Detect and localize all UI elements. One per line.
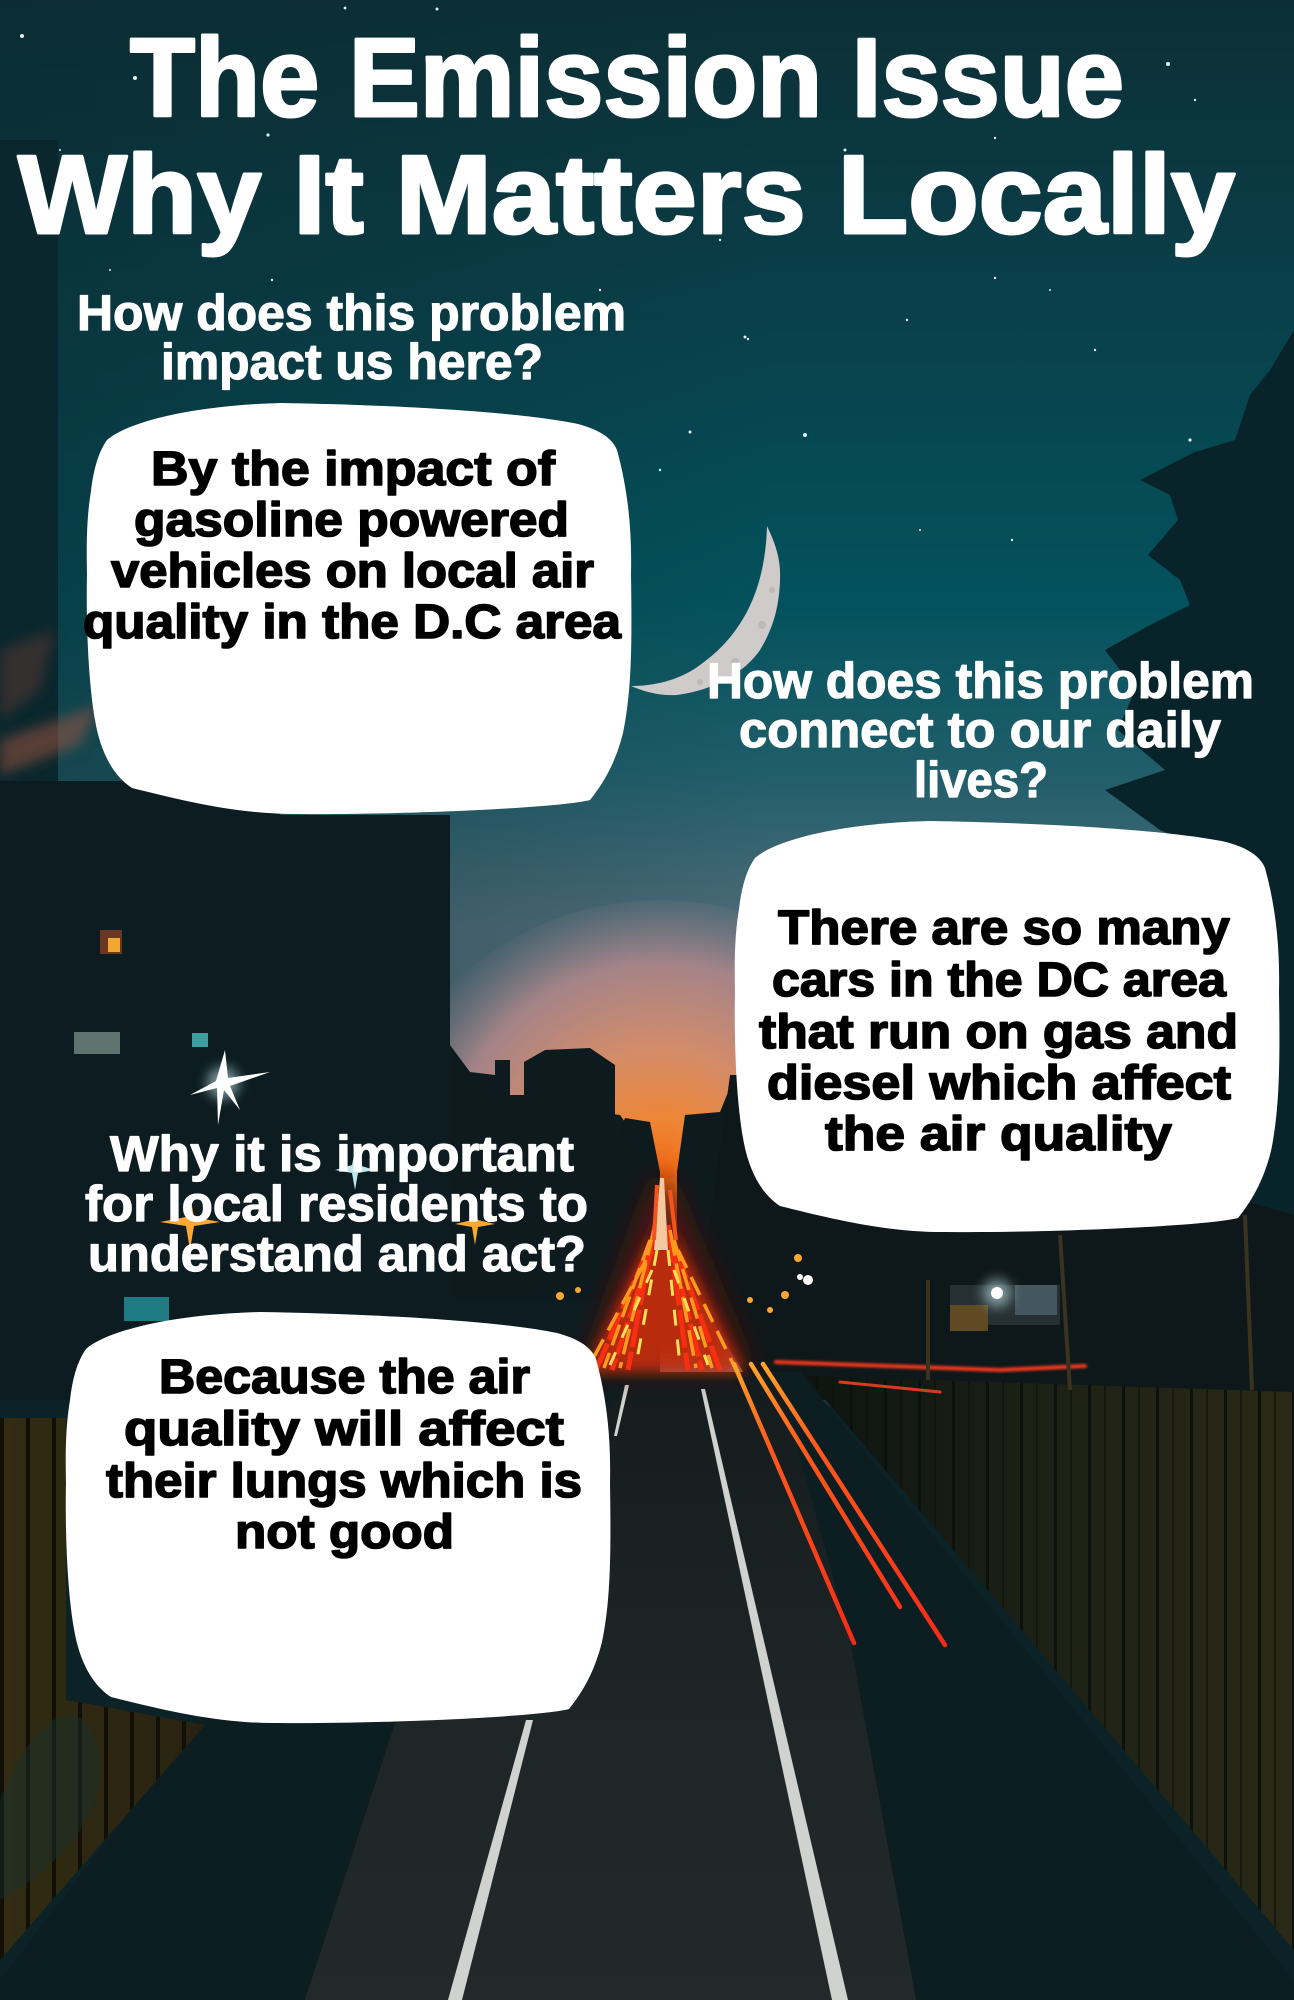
heading: why it is important bbox=[85, 1126, 588, 1282]
road bbox=[0, 1372, 1294, 2000]
panel: why residents should act: quality will affect bbox=[124, 1403, 564, 1456]
left building block bbox=[0, 781, 660, 1400]
heading: how does this problem connect to our daily lives: connect to our daily bbox=[739, 702, 1221, 758]
panel: local impact: quality in the D.C area bbox=[83, 596, 621, 649]
tree silhouette on right bbox=[1105, 330, 1294, 1240]
panel: why residents should act: their lungs which is bbox=[106, 1455, 582, 1508]
heading: why it is important: for local residents to bbox=[85, 1176, 588, 1232]
left glow rays bbox=[0, 630, 100, 775]
heading: why it is important: understand and act? bbox=[88, 1226, 586, 1282]
panel: why residents should act bbox=[66, 1312, 610, 1723]
dark right side buildings and trees bbox=[700, 1075, 1294, 1400]
building lights bbox=[74, 930, 1060, 1331]
right fence bbox=[805, 1376, 1294, 1950]
city skyline bbox=[450, 1045, 760, 1300]
stars bbox=[20, 7, 1196, 541]
left fence bbox=[0, 1418, 205, 1960]
distant traffic glow bbox=[585, 1178, 750, 1372]
star glints from street lights bbox=[160, 1050, 1011, 1313]
road markings bbox=[448, 1385, 848, 2000]
tall dark building on left bbox=[0, 140, 58, 840]
panel: daily lives: diesel which affect bbox=[767, 1057, 1231, 1110]
panel: daily lives: There are so many bbox=[778, 902, 1230, 955]
panel: daily lives: the air quality bbox=[825, 1108, 1172, 1161]
heading: how does this problem connect to our daily lives bbox=[707, 653, 1254, 808]
panel: local impact: vehicles on local air bbox=[111, 545, 594, 598]
title bbox=[18, 16, 1235, 257]
panel: why residents should act: Because the air bbox=[159, 1351, 530, 1404]
panel: daily lives: cars in the DC area bbox=[772, 954, 1226, 1007]
heading: how does this problem connect to our daily lives: How does this problem bbox=[707, 653, 1254, 709]
panel: daily lives: that run on gas and bbox=[759, 1006, 1238, 1059]
heading: how does this problem impact us here: impact us here? bbox=[161, 334, 543, 390]
background: night sky and sunset bbox=[0, 0, 1294, 1460]
panel: why residents should act: not good bbox=[235, 1506, 454, 1559]
street poles bbox=[928, 1215, 1252, 1390]
heading: how does this problem impact us here: How does this problem bbox=[77, 285, 626, 341]
title: The Emission Issue bbox=[130, 16, 1124, 140]
moon crescent bbox=[631, 526, 780, 695]
panel: local impact bbox=[83, 403, 631, 814]
heading: why it is important: Why it is important bbox=[110, 1126, 574, 1182]
panel: daily lives bbox=[735, 821, 1279, 1232]
title: Why It Matters Locally bbox=[18, 133, 1235, 257]
panel: local impact: gasoline powered bbox=[134, 494, 569, 547]
red light trails bbox=[734, 1362, 1085, 1645]
heading: how does this problem impact us here bbox=[77, 285, 626, 390]
lit road surface bbox=[305, 1385, 916, 2000]
panel: local impact: By the impact of bbox=[151, 443, 556, 496]
heading: how does this problem connect to our daily lives: lives? bbox=[914, 752, 1048, 808]
